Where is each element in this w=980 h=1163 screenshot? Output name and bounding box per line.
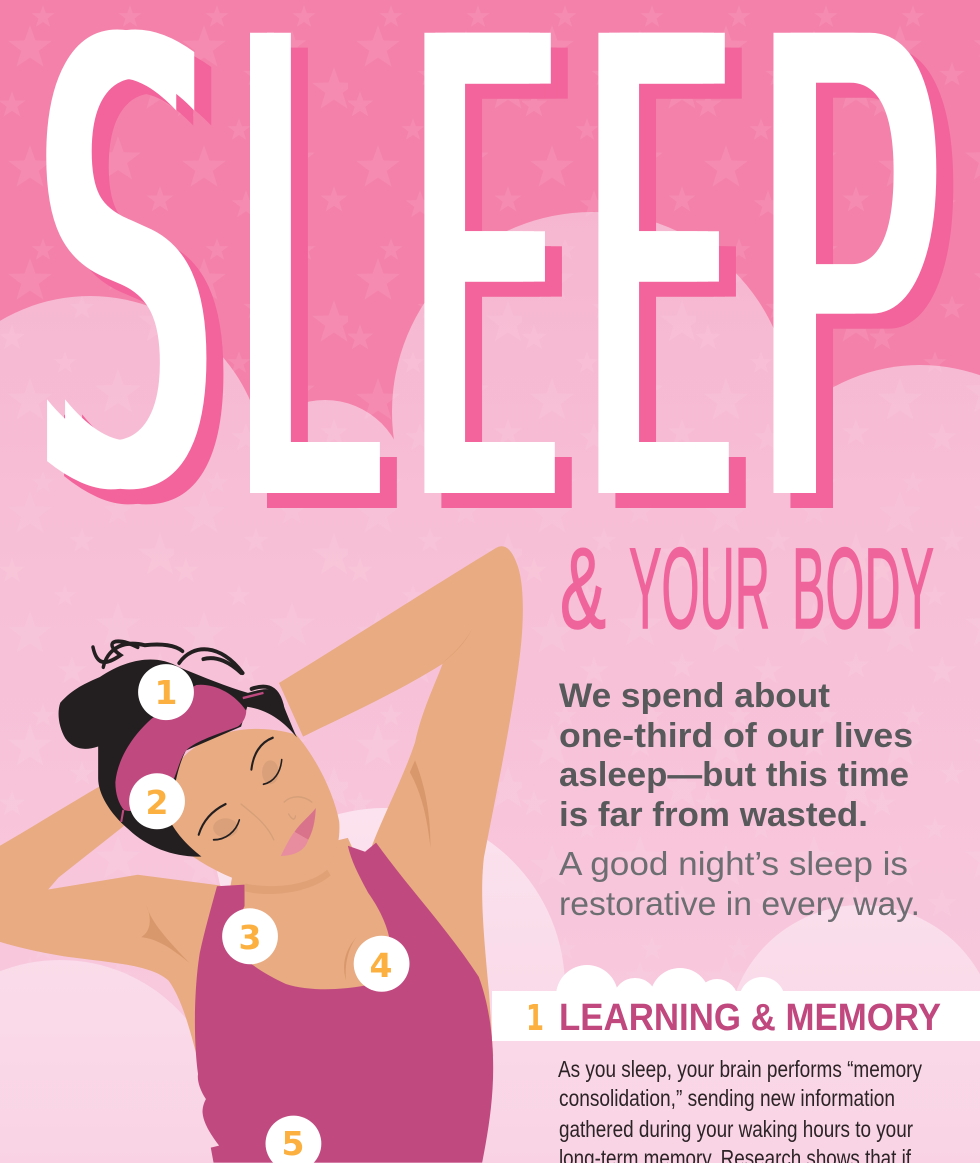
left arm: [0, 784, 220, 1060]
title: SLEEP: [28, 0, 954, 640]
marker numbers: 1: [155, 673, 177, 712]
front cloud layer: [0, 808, 980, 1163]
section heading: LEARNING & MEMORY: [559, 997, 941, 1039]
neck and chest: [220, 838, 393, 997]
hair: [59, 659, 297, 857]
armpit and collarbone creases: [141, 629, 472, 981]
marker numbers: 4: [370, 946, 392, 985]
marker numbers: [146, 673, 392, 1163]
intro bold text: asleep—but this time: [559, 756, 909, 794]
marker numbers: 5: [282, 1124, 304, 1163]
section body text: [558, 1056, 922, 1163]
right arm: [279, 546, 523, 1056]
subtitle: & YOUR BODY: &: [560, 525, 606, 653]
marker numbers: 3: [239, 918, 261, 957]
hair strands: [93, 641, 284, 721]
pale pillow patch behind neck: [215, 864, 248, 886]
subtitle: & YOUR BODY: YOUR: [629, 525, 770, 653]
section band with small clouds: [492, 965, 980, 1041]
closed eye and brow, lower: [199, 804, 239, 840]
tank top: [195, 843, 493, 1163]
intro bold text: We spend about: [559, 677, 830, 715]
marker numbers: 2: [146, 783, 168, 822]
intro regular text: restorative in every way.: [559, 885, 920, 922]
lips: [281, 808, 316, 856]
sleep mask: [115, 685, 246, 811]
head shadow on neck: [245, 870, 331, 894]
intro regular text: A good night’s sleep is: [559, 845, 908, 882]
intro bold text: one-third of our lives: [559, 717, 913, 755]
section body text: consolidation,” sending new information: [559, 1085, 895, 1111]
intro bold text: [559, 677, 913, 834]
mask straps: [121, 693, 263, 822]
closed eye and brow, upper: [251, 738, 282, 784]
face: [171, 729, 339, 884]
marker circles: [129, 664, 409, 1163]
section body text: gathered during your waking hours to your: [559, 1116, 913, 1142]
section number 1: 1: [526, 998, 544, 1039]
intro regular text: [559, 845, 920, 922]
nose: [241, 797, 312, 840]
figure: woman sleeping with mask: [0, 546, 523, 1163]
intro bold text: is far from wasted.: [559, 796, 868, 834]
